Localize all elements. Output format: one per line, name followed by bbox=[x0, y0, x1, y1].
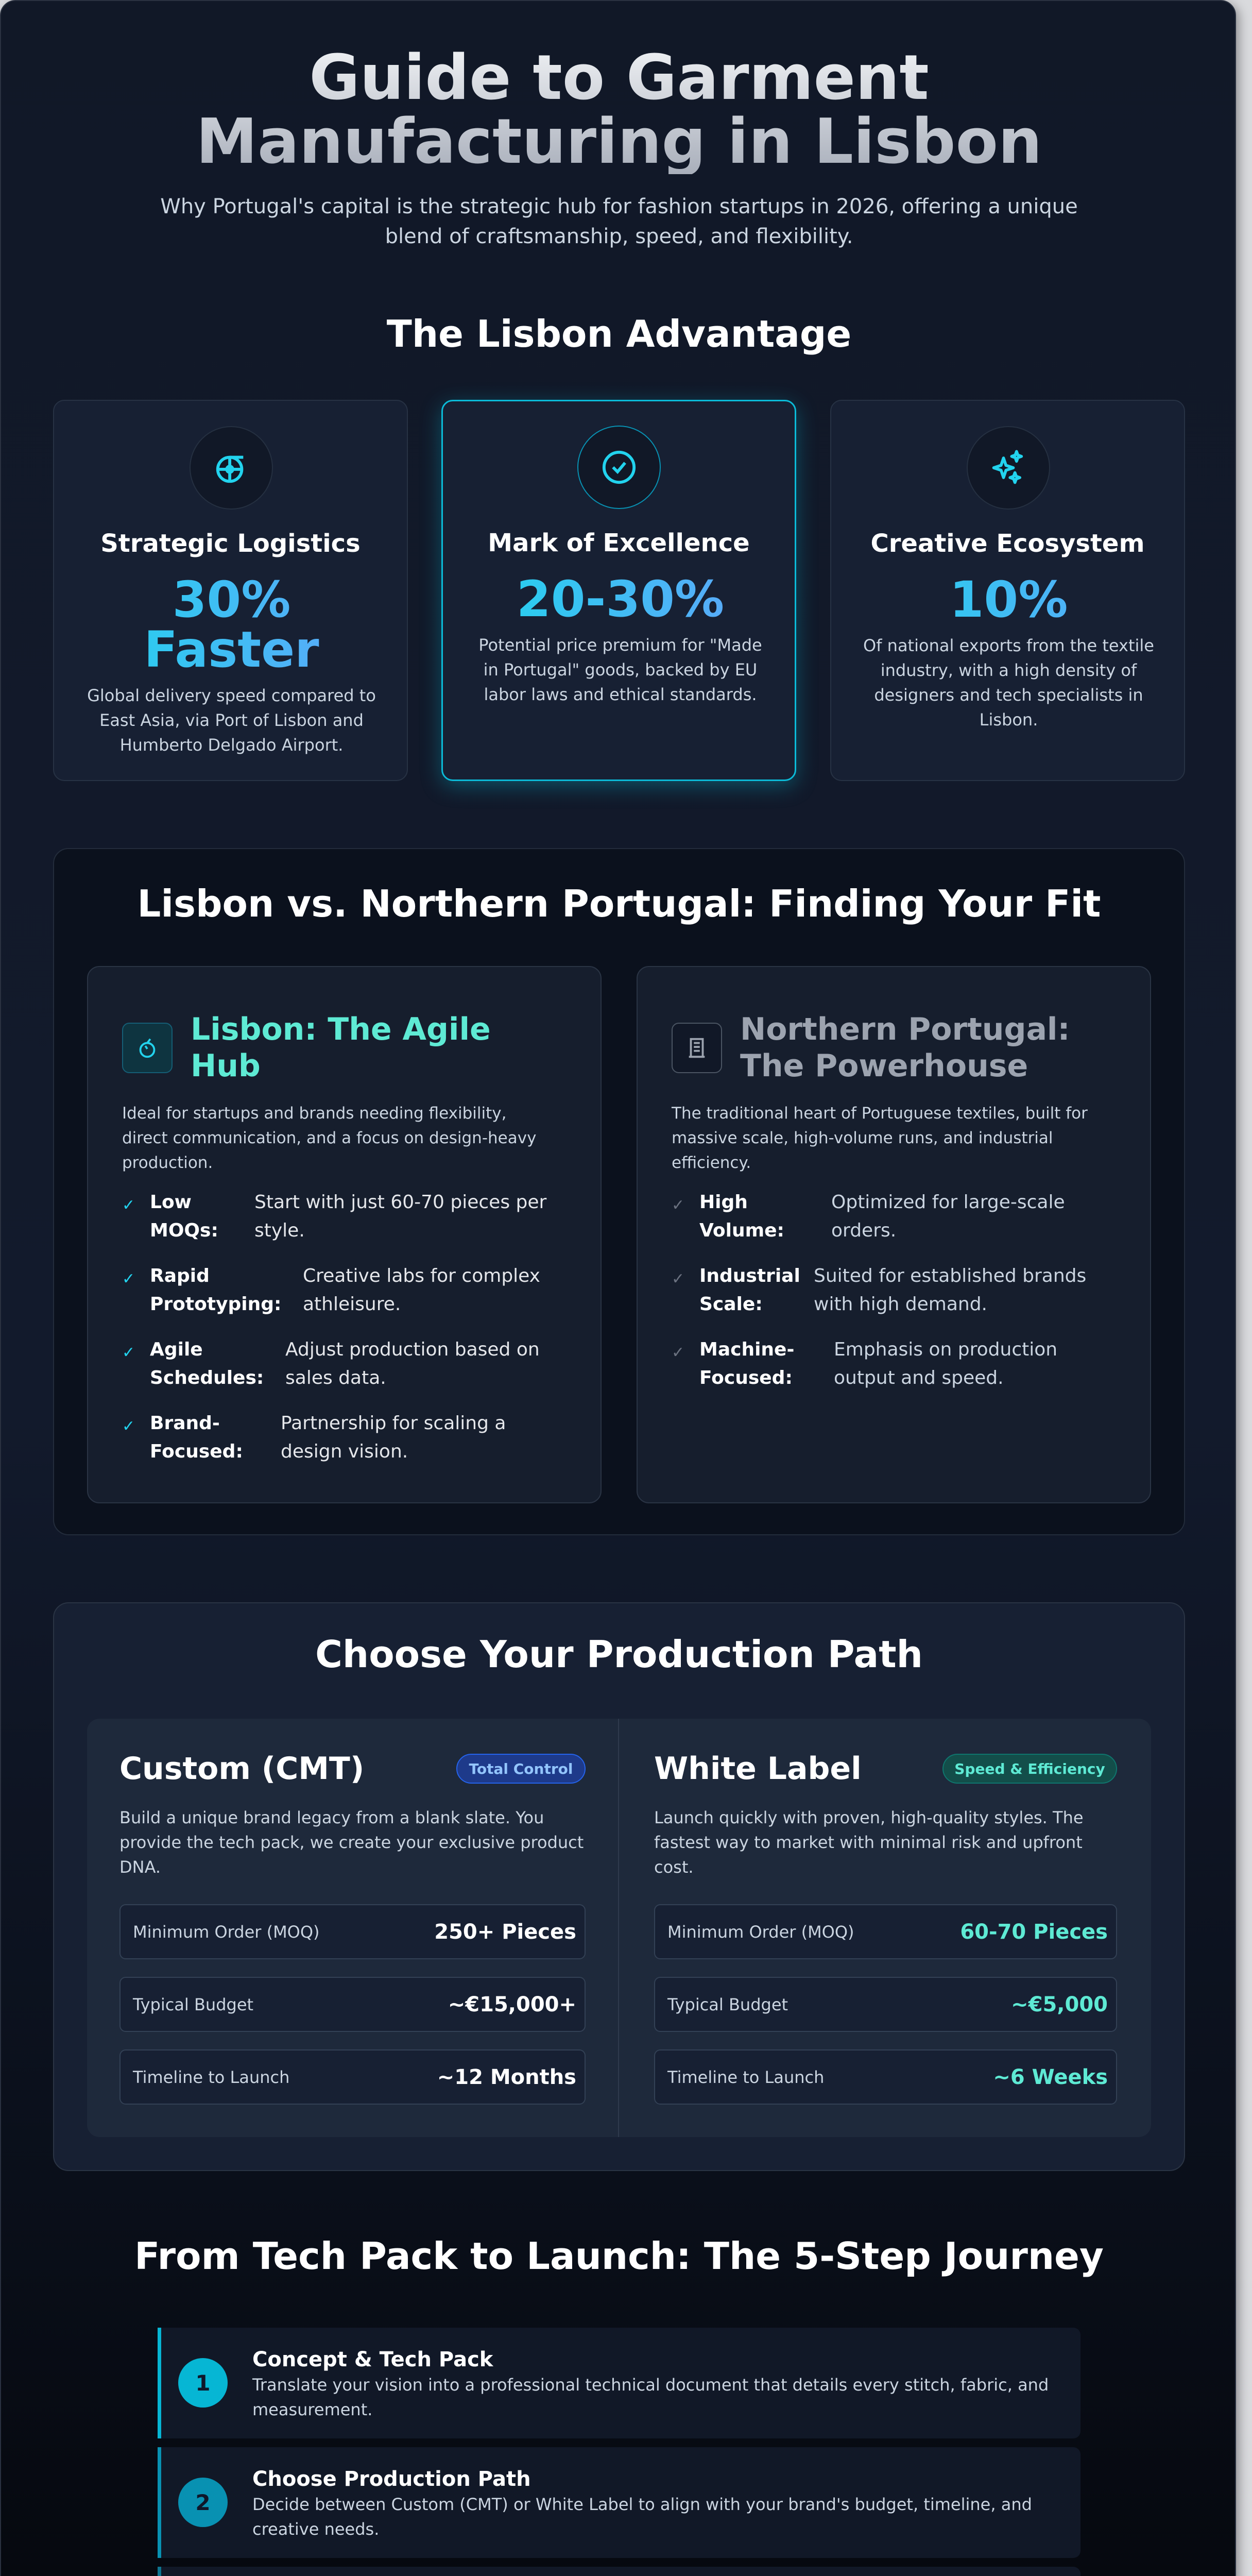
list items: Partnership for scaling a bbox=[281, 1413, 506, 1434]
card heading with icon bbox=[122, 1011, 491, 1084]
step 2: Choose Production Path bbox=[252, 2467, 531, 2491]
column: White Label: Typical Budget bbox=[667, 1995, 788, 2014]
list items: Scale: bbox=[699, 1294, 763, 1315]
comparison box bbox=[87, 1719, 1151, 2137]
column: White Label: White Label bbox=[654, 1751, 862, 1787]
card title: Strategic Logistics bbox=[100, 529, 361, 558]
card heading with icon bbox=[672, 1011, 1070, 1084]
list items bbox=[122, 1192, 547, 1462]
list items: ✓ bbox=[122, 1417, 135, 1435]
list items: output and speed. bbox=[834, 1367, 1004, 1388]
stat and description bbox=[87, 571, 376, 755]
list items: Machine- bbox=[699, 1339, 794, 1360]
heading: Choose Your Production Path bbox=[315, 1633, 923, 1676]
list items: Start with just 60-70 pieces per bbox=[254, 1192, 546, 1213]
list items: Volume: bbox=[699, 1220, 784, 1241]
card heading with icon: Hub bbox=[191, 1048, 261, 1084]
list items: Low bbox=[150, 1192, 192, 1213]
list items: ✓ bbox=[122, 1196, 135, 1214]
column: Custom CMT: Minimum Order (MOQ) bbox=[133, 1922, 320, 1941]
step 2: Decide between Custom (CMT) or White Label to align with your brand's budget, timeline, and creative needs. bbox=[252, 2495, 1032, 2539]
list items: Adjust production based on bbox=[285, 1339, 540, 1360]
stat and description: 10% bbox=[950, 571, 1068, 629]
list items: Emphasis on production bbox=[834, 1339, 1057, 1360]
stat and description bbox=[478, 570, 762, 704]
list items: Focused: bbox=[150, 1441, 243, 1462]
column: Custom CMT: 250+ Pieces bbox=[434, 1920, 576, 1943]
list items: athleisure. bbox=[303, 1294, 401, 1315]
column: White Label: Timeline to Launch bbox=[667, 2067, 824, 2087]
step 1: Concept & Tech Pack bbox=[252, 2348, 493, 2371]
stat and description: Faster bbox=[144, 621, 319, 679]
list items bbox=[672, 1192, 1086, 1388]
subtitle: Why Portugal's capital is the strategic hub for fashion startups in 2026, offering a unique blend of craftsmanship, speed, and flexibility. bbox=[160, 195, 1078, 248]
list items: Suited for established brands bbox=[814, 1265, 1086, 1286]
heading: 5-step journey: From Tech Pack to Launch: The 5-Step Journey bbox=[134, 2234, 1104, 2278]
panel: Lisbon vs Northern Portugal bbox=[53, 848, 1185, 1535]
list items: style. bbox=[254, 1220, 305, 1241]
list items: with high demand. bbox=[814, 1294, 987, 1315]
stat and description bbox=[863, 571, 1154, 730]
column: White Label bbox=[654, 1751, 1117, 2105]
title: Guide to Garment bbox=[309, 42, 929, 114]
panel: Creative Ecosystem bbox=[830, 400, 1185, 781]
list items: orders. bbox=[831, 1220, 896, 1241]
list items: ✓ bbox=[672, 1344, 684, 1362]
icon: globe target bbox=[190, 426, 273, 510]
step 1: 1 bbox=[195, 2370, 211, 2396]
column: White Label: ~6 Weeks bbox=[993, 2065, 1108, 2089]
card title: Mark of Excellence bbox=[488, 529, 750, 557]
description: Ideal for startups and brands needing flexibility, direct communication, and a focus on design-heavy production. bbox=[122, 1104, 536, 1172]
column: Custom CMT: Custom (CMT) bbox=[119, 1751, 364, 1787]
column: Custom CMT: Total Control bbox=[469, 1760, 573, 1777]
list items: ✓ bbox=[122, 1344, 135, 1362]
panel: Strategic Logistics bbox=[53, 400, 408, 781]
column: Custom CMT: Typical Budget bbox=[133, 1995, 253, 2014]
stat and description: 30% bbox=[173, 571, 290, 629]
step 1: Translate your vision into a professional technical document that details every stitch, fabric, and measurement. bbox=[252, 2375, 1049, 2419]
heading: Lisbon vs. Northern Portugal: Finding Your Fit bbox=[138, 882, 1101, 925]
description: The traditional heart of Portuguese textiles, built for massive scale, high-volume runs, and industrial efficiency. bbox=[672, 1104, 1088, 1172]
list items: Prototyping: bbox=[150, 1294, 281, 1315]
list items: Brand- bbox=[150, 1413, 220, 1434]
column: White Label: ~€5,000 bbox=[1011, 1993, 1108, 2016]
card: Northern Portugal powerhouse bbox=[637, 966, 1151, 1503]
list items: Creative labs for complex bbox=[303, 1265, 540, 1286]
column: Custom CMT: Build a unique brand legacy from a blank slate. You provide the tech pack, we create your exclusive product DNA. bbox=[119, 1808, 584, 1877]
list items: Optimized for large-scale bbox=[831, 1192, 1065, 1213]
column: White Label: Launch quickly with proven, high-quality styles. The fastest way to market with minimal risk and upfront cost. bbox=[654, 1808, 1084, 1877]
stat and description: Of national exports from the textile industry, with a high density of designers and tech specialists in Lisbon. bbox=[863, 636, 1154, 730]
list items: Industrial bbox=[699, 1265, 800, 1286]
panel: Choose Your Production Path bbox=[53, 1602, 1185, 2171]
panel: Mark of Excellence bbox=[441, 400, 796, 781]
icon: sparkles bbox=[967, 426, 1050, 510]
title bbox=[1, 46, 1237, 174]
column: Custom CMT: ~€15,000+ bbox=[448, 1993, 576, 2016]
stat and description: Potential price premium for "Made in Portugal" goods, backed by EU labor laws and ethical standards. bbox=[478, 635, 762, 704]
step 1 bbox=[158, 2328, 1081, 2438]
column: White Label: Speed & Efficiency bbox=[954, 1760, 1105, 1777]
list items: Focused: bbox=[699, 1367, 793, 1388]
list items: MOQs: bbox=[150, 1220, 218, 1241]
step 3 bbox=[158, 2567, 1081, 2576]
card heading with icon: Lisbon: The Agile bbox=[191, 1011, 491, 1047]
column: Custom CMT bbox=[87, 1719, 619, 2137]
column: White Label: 60-70 Pieces bbox=[960, 1920, 1108, 1943]
icon: check circle bbox=[577, 426, 661, 509]
list items: Agile bbox=[150, 1339, 203, 1360]
stat and description: 20-30% bbox=[517, 570, 724, 628]
card heading with icon: Northern Portugal: bbox=[740, 1011, 1070, 1047]
stat and description: Global delivery speed compared to East Asia, via Port of Lisbon and Humberto Delgado Airport. bbox=[87, 686, 376, 755]
card heading with icon: The Powerhouse bbox=[740, 1048, 1028, 1084]
list items: sales data. bbox=[285, 1367, 386, 1388]
list items: design vision. bbox=[281, 1441, 408, 1462]
heading: The Lisbon Advantage: The Lisbon Advantage bbox=[387, 312, 851, 355]
step 2 bbox=[158, 2447, 1081, 2558]
step 2: 2 bbox=[195, 2489, 211, 2515]
list items: ✓ bbox=[672, 1196, 684, 1214]
list items: Rapid bbox=[150, 1265, 210, 1286]
list items: ✓ bbox=[672, 1270, 684, 1288]
list items: Schedules: bbox=[150, 1367, 264, 1388]
column: White Label: Minimum Order (MOQ) bbox=[667, 1922, 854, 1941]
column: Custom CMT: Timeline to Launch bbox=[133, 2067, 289, 2087]
card: Lisbon agile hub bbox=[87, 966, 602, 1503]
column: Custom CMT: ~12 Months bbox=[437, 2065, 576, 2089]
list items: ✓ bbox=[122, 1270, 135, 1288]
card title: Creative Ecosystem bbox=[871, 529, 1144, 558]
list items: High bbox=[699, 1192, 748, 1213]
title: Manufacturing in Lisbon bbox=[196, 106, 1042, 178]
